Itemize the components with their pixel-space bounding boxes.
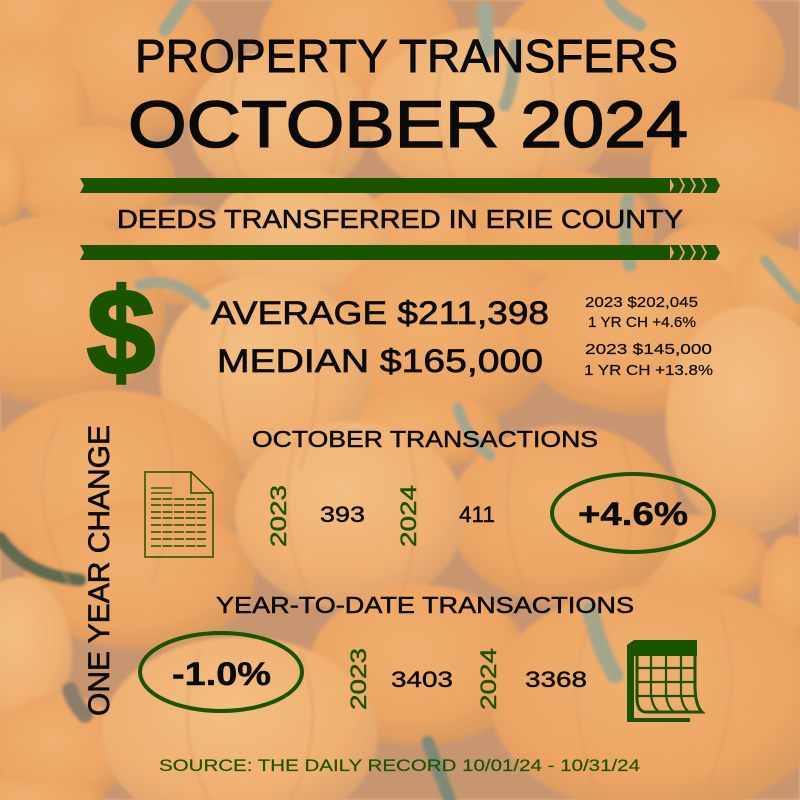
panel: price figures — [211, 295, 549, 379]
icon: document — [145, 472, 213, 557]
callout: october change: +4.6% — [578, 496, 688, 532]
title line 2: OCTOBER 2024 — [128, 87, 688, 161]
heading: year-to-date transactions: YEAR-TO-DATE TRANSACTIONS — [216, 592, 634, 618]
panel: ytd figures — [346, 648, 587, 710]
count 2023: 3403 — [391, 667, 453, 692]
panel: october figures — [266, 485, 495, 547]
subtitle: DEEDS TRANSFERRED IN ERIE COUNTY — [117, 206, 683, 234]
icon: calendar — [627, 640, 702, 722]
callout: ytd change: -1.0% — [172, 656, 271, 692]
ribbon bottom — [80, 245, 720, 260]
count 2024: 3368 — [525, 667, 587, 692]
median price: MEDIAN $165,000 — [217, 343, 543, 379]
ribbon top — [80, 178, 720, 193]
average change: 1 YR CH +4.6% — [588, 314, 696, 331]
count 2023: 393 — [320, 502, 365, 527]
callout: october change — [552, 474, 714, 552]
year 2023: 2023 — [346, 648, 371, 710]
year 2023: 2023 — [266, 485, 291, 547]
vertical label: one year change: ONE YEAR CHANGE — [83, 425, 116, 716]
title line 1: PROPERTY TRANSFERS — [135, 30, 678, 82]
title — [128, 30, 688, 161]
median 2023: 2023 $145,000 — [585, 341, 712, 358]
heading: october transactions: OCTOBER TRANSACTIONS — [252, 426, 598, 452]
icon: dollar sign: $ — [87, 264, 155, 400]
average price: AVERAGE $211,398 — [211, 295, 549, 331]
year 2024: 2024 — [396, 485, 421, 547]
year 2024: 2024 — [476, 648, 501, 710]
panel: prior year comparison — [584, 294, 713, 379]
average 2023: 2023 $202,045 — [585, 294, 698, 311]
source note: SOURCE: THE DAILY RECORD 10/01/24 - 10/31/24 — [159, 756, 640, 775]
callout: ytd change — [140, 633, 302, 711]
median change: 1 YR CH +13.8% — [584, 362, 713, 379]
count 2024: 411 — [459, 502, 495, 527]
